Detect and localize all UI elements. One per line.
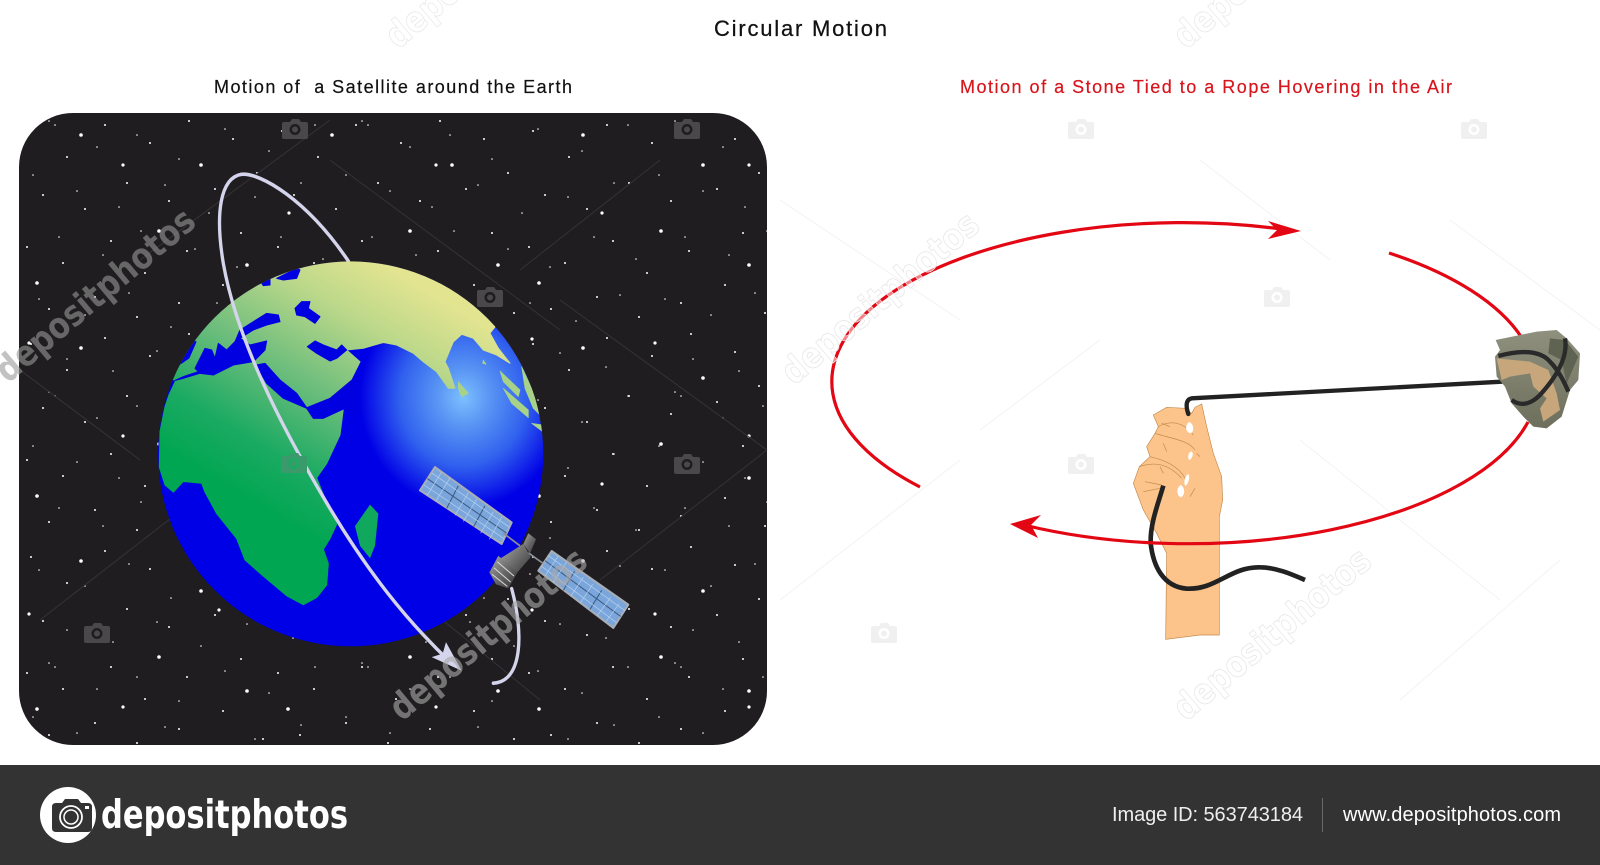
rope: loose end xyxy=(1151,486,1305,589)
connecting rods xyxy=(503,533,543,564)
rope wrapped around stone xyxy=(1498,338,1568,404)
seas: Mediterranean xyxy=(175,313,280,380)
satellite body xyxy=(489,533,536,589)
hand, rope and stone xyxy=(1133,330,1580,639)
satellite xyxy=(420,467,628,628)
watermark: text on satellite: depositphotos xyxy=(381,540,595,729)
red motion path: arc to stone xyxy=(1389,253,1522,338)
logo wordmark: depositphotos xyxy=(101,793,348,838)
watermark: camera mark on earth xyxy=(281,453,307,473)
seas: Black Sea, Persian Gulf and northern ocean xyxy=(262,268,347,361)
detail over land: seas and islands of the northern hemisphere xyxy=(150,268,543,432)
red motion path: lower arc with arrowhead xyxy=(1010,422,1528,544)
website url: www.depositphotos.com xyxy=(1342,804,1561,826)
watermarks: faint lines on white xyxy=(780,160,1600,700)
stone xyxy=(1495,330,1580,428)
red motion path: upper-left arc with arrowhead xyxy=(832,221,1301,487)
seas: Red Sea and Gulf of Aden xyxy=(256,363,358,418)
watermark: text on white lower: depositphotos xyxy=(1165,540,1379,729)
panel: space background with stars xyxy=(19,113,767,745)
fingernails xyxy=(1177,422,1193,497)
heading: satellite panel: Motion of a Satellite around the Earth xyxy=(214,77,572,97)
illustration: earth, orbit and satellite xyxy=(150,174,628,683)
divider xyxy=(1322,798,1323,832)
orbit: lower arc past satellite xyxy=(493,589,519,683)
solar panel: outer xyxy=(538,551,628,628)
land: Africa and Eurasia xyxy=(153,231,513,605)
logo icon: camera in circle xyxy=(40,787,96,843)
land: Madagascar xyxy=(355,505,378,558)
seas: Atlantic margin xyxy=(159,340,197,432)
orbit: back arc behind earth xyxy=(242,174,348,261)
watermark: camera marks on dark panel xyxy=(84,119,700,643)
land: Sri Lanka and South East Asia xyxy=(458,360,543,432)
orbit: front arc with arrowhead xyxy=(220,174,462,671)
hand xyxy=(1133,404,1223,639)
watermark: text on white upper: depositphotos xyxy=(773,204,987,393)
heading: stone panel: Motion of a Stone Tied to a Rope Hovering in the Air xyxy=(960,77,1452,97)
rope: to stone xyxy=(1187,382,1502,414)
watermark: camera marks on white xyxy=(871,119,1487,643)
image id: Image ID: 563743184 xyxy=(1112,804,1303,826)
solar panel: inner xyxy=(420,467,512,544)
title: Circular Motion xyxy=(714,16,887,41)
earth globe xyxy=(150,231,543,646)
footer bar xyxy=(0,765,1600,865)
